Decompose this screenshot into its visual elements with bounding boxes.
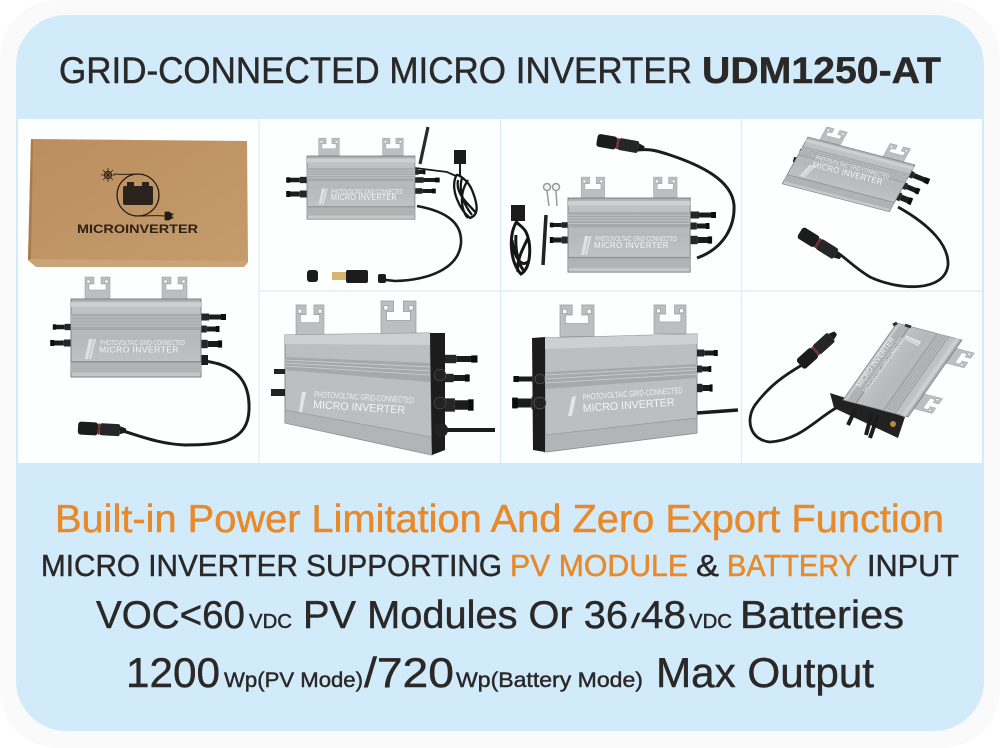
line: max output xyxy=(126,649,874,696)
line: input voltage: PV Modules Or 36 xyxy=(303,594,628,637)
inverter photo: top view with antenna and meter xyxy=(286,127,477,283)
line: supported inputs xyxy=(41,549,959,583)
inverter photo: front view with accessories xyxy=(511,134,734,274)
inverter photo: angled top right: PHOTOVOLTAIC GRID-CONNECTED xyxy=(815,155,890,181)
line: input voltage xyxy=(96,594,904,637)
screws and rings xyxy=(544,184,560,206)
inverter photo: front view with accessories: PHOTOVOLTAIC GRID-CONNECTED xyxy=(595,236,677,243)
line: max output: 1200 xyxy=(126,649,220,696)
mounting rail xyxy=(543,215,546,265)
product photo grid xyxy=(18,119,982,463)
line: supported inputs: INPUT xyxy=(867,549,959,583)
line: supported inputs: BATTERY xyxy=(727,549,858,583)
line: supported inputs: MICRO INVERTER SUPPORTING xyxy=(41,549,502,583)
inverter photo: large right-angled view xyxy=(512,305,738,452)
inverter photo: large left-angled view: PHOTOVOLTAIC GRID-CONNECTED xyxy=(314,389,414,405)
title: GRID-CONNECTED MICRO INVERTER xyxy=(59,49,692,91)
inverter photo: angled top right: MICRO INVERTER xyxy=(812,159,884,187)
packaging box photo xyxy=(28,139,248,267)
line: max output: Wp(Battery Mode) xyxy=(456,669,643,692)
inverter photo: angled top right xyxy=(782,124,948,287)
headline: power limitation: Built-in Power Limitation And Zero Export Function xyxy=(55,498,944,541)
inverter photo: angled lower right: PHOTOVOLTAIC GRID-CONNECTED xyxy=(863,337,906,394)
line: input voltage: 48 xyxy=(641,594,686,637)
line: max output: /720 xyxy=(364,649,454,696)
line: max output: Max Output xyxy=(656,649,874,696)
line: input voltage: VOC<60 xyxy=(96,594,245,637)
inverter photo: angled lower right: MICRO INVERTER xyxy=(854,335,897,389)
line: input voltage: VDC xyxy=(689,611,732,633)
inverter photo: top view with antenna and meter: PHOTOVOLTAIC GRID-CONNECTED xyxy=(331,189,403,196)
box logo icon xyxy=(101,168,174,220)
line: input voltage: / xyxy=(631,611,641,633)
line: supported inputs: PV MODULE xyxy=(510,549,688,583)
inverter photo: front view with accessories: MICRO INVERTER xyxy=(594,240,669,250)
inverter photo: front view lower left xyxy=(50,277,249,445)
line: input voltage: VDC xyxy=(249,611,292,633)
inverter photo: large left-angled view xyxy=(271,301,495,455)
inverter photo: large left-angled view: MICRO INVERTER xyxy=(313,399,405,417)
line: input voltage: Batteries xyxy=(740,594,904,637)
inverter photo: large right-angled view: MICRO INVERTER xyxy=(582,397,675,415)
inverter photo: angled lower right xyxy=(750,323,980,442)
coiled meter cable xyxy=(511,205,530,274)
title: UDM1250-AT xyxy=(702,49,941,91)
inverter photo: front view lower left: PHOTOVOLTAIC GRID-CONNECTED xyxy=(100,340,185,347)
inverter photo: large right-angled view: PHOTOVOLTAIC GRID-CONNECTED xyxy=(582,385,683,402)
inverter photo: top view with antenna and meter: MICRO INVERTER xyxy=(331,192,397,202)
line: supported inputs: & xyxy=(696,549,719,583)
box label: MICROINVERTER xyxy=(77,224,199,236)
line: max output: Wp(PV Mode) xyxy=(224,669,363,692)
inverter photo: front view lower left: MICRO INVERTER xyxy=(99,344,179,354)
